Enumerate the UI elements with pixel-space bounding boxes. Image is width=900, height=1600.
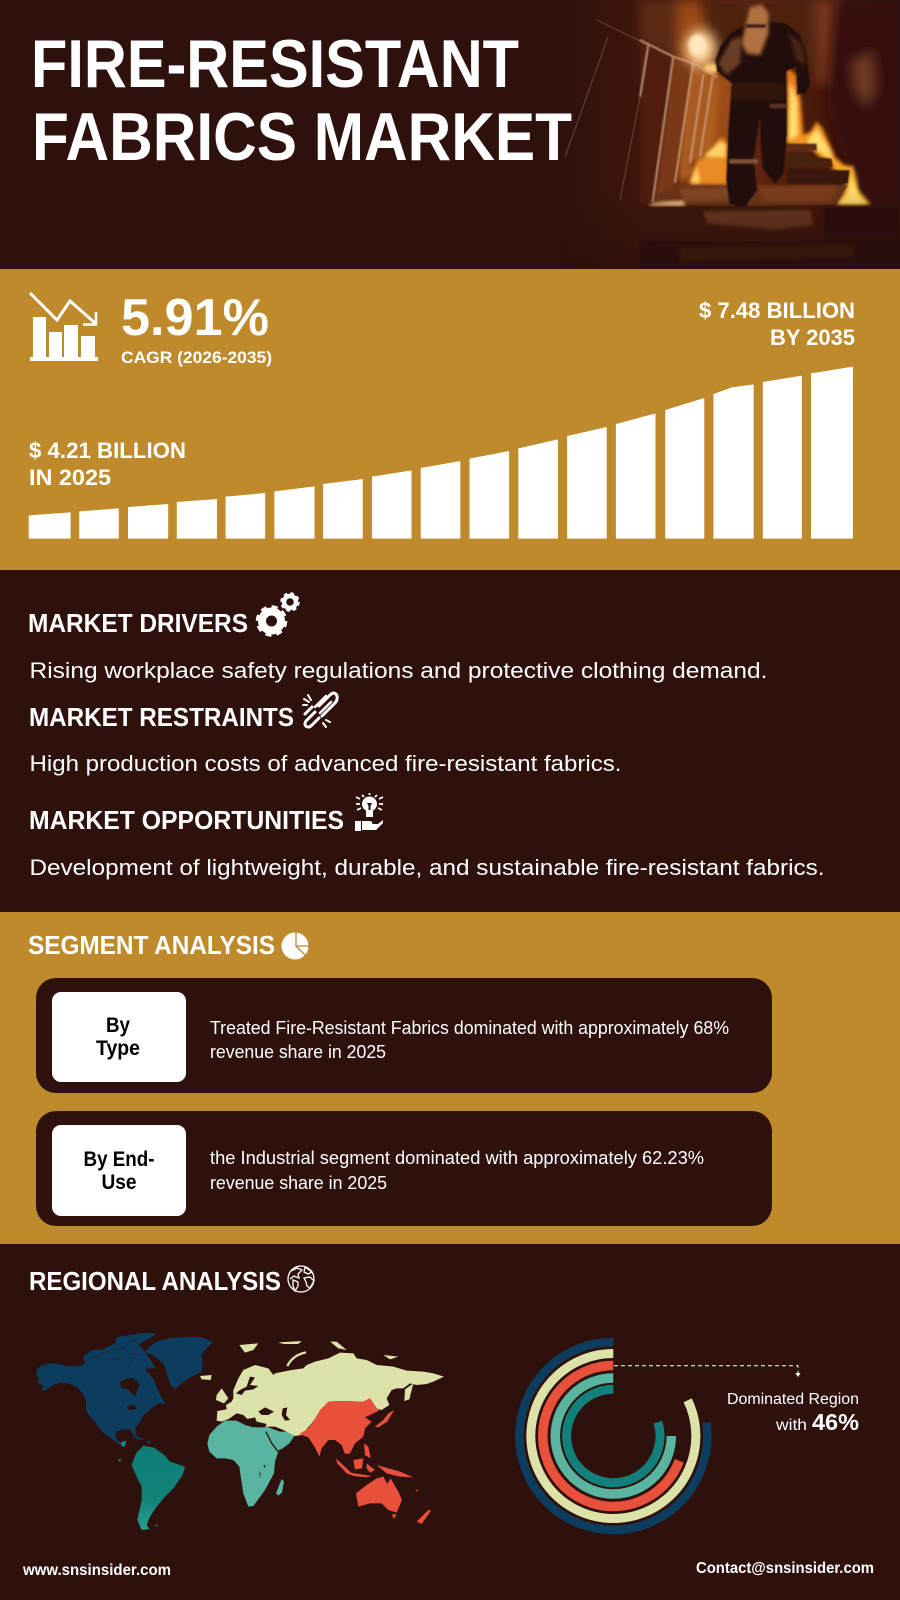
callout arrow: dashed leader xyxy=(614,1366,800,1377)
panel: market growth xyxy=(0,269,900,570)
footer: website: www.snsinsider.com xyxy=(22,1562,171,1579)
end value label: $ 7.48 BILLION xyxy=(699,298,855,323)
callout: dominated region: Dominated Region xyxy=(727,1391,859,1408)
callout: dominated region xyxy=(727,1391,859,1435)
icon: broken link xyxy=(303,693,337,727)
text: by type: Treated Fire-Resistant Fabrics dominated with approximately 68% xyxy=(210,1018,729,1038)
world map xyxy=(36,1333,444,1530)
heading: segment analysis: SEGMENT ANALYSIS xyxy=(28,930,275,960)
text: by end-use xyxy=(210,1148,704,1193)
label box: by end-use xyxy=(52,1125,186,1216)
radial chart: regional share xyxy=(519,1342,707,1530)
card: by type xyxy=(36,978,772,1093)
start value label xyxy=(29,438,186,490)
end value label xyxy=(699,298,855,350)
title xyxy=(31,26,572,175)
text: opportunities: Development of lightweight, durable, and sustainable fire-resistant fabrics. xyxy=(30,855,824,880)
card: by end-use xyxy=(36,1111,772,1226)
heading: market restraints: MARKET RESTRAINTS xyxy=(29,702,294,732)
CAGR value: 5.91% xyxy=(121,289,269,347)
label box: by type: By xyxy=(106,1014,130,1037)
label box: by type: Type xyxy=(96,1037,140,1060)
title: FIRE-RESISTANT xyxy=(31,26,519,102)
text: by end-use: revenue share in 2025 xyxy=(210,1173,387,1193)
footer: contact: Contact@snsinsider.com xyxy=(696,1560,874,1577)
label box: by end-use: Use xyxy=(102,1171,136,1194)
callout: dominated region: with xyxy=(775,1417,807,1434)
map: americas xyxy=(36,1333,213,1530)
bar chart: market growth xyxy=(29,367,853,539)
text: restraints: High production costs of advanced fire-resistant fabrics. xyxy=(30,751,622,776)
callout: dominated region: 46% xyxy=(812,1409,859,1435)
label box: by type xyxy=(52,992,186,1082)
region: europe and north asia xyxy=(200,1341,444,1436)
start value label: IN 2025 xyxy=(29,465,111,490)
panel: market dynamics xyxy=(0,570,900,912)
text: by end-use: the Industrial segment dominated with approximately 62.23% xyxy=(210,1148,704,1168)
icon: globe xyxy=(288,1266,314,1292)
panel: segment analysis xyxy=(0,912,900,1244)
region: south america xyxy=(118,1446,185,1530)
panel: regional analysis xyxy=(0,1244,900,1600)
panel: header xyxy=(0,0,900,270)
region: africa and middle east xyxy=(207,1421,295,1507)
heading: market drivers: MARKET DRIVERS xyxy=(28,608,248,638)
icon: hand with light bulb xyxy=(355,793,383,831)
icon: pie chart xyxy=(282,932,310,960)
title: FABRICS MARKET xyxy=(32,99,572,175)
heading: regional analysis: REGIONAL ANALYSIS xyxy=(29,1266,281,1296)
text: drivers: Rising workplace safety regulations and protective clothing demand. xyxy=(30,658,768,683)
icon: gears xyxy=(258,594,298,635)
start value label: $ 4.21 BILLION xyxy=(29,438,186,463)
end value label: BY 2035 xyxy=(770,325,855,350)
text: by type: revenue share in 2025 xyxy=(210,1042,386,1062)
map: old world xyxy=(200,1341,444,1524)
label box: by end-use: By End- xyxy=(84,1148,154,1171)
icon: chart with trend arrow xyxy=(30,293,98,361)
region: north america xyxy=(36,1333,213,1447)
photo: firefighter on burning stairs xyxy=(560,0,900,270)
region: asia pacific xyxy=(299,1398,431,1524)
text: by type xyxy=(210,1018,729,1062)
heading: market opportunities: MARKET OPPORTUNITIES xyxy=(29,805,344,835)
CAGR label: CAGR (2026-2035) xyxy=(121,348,272,367)
